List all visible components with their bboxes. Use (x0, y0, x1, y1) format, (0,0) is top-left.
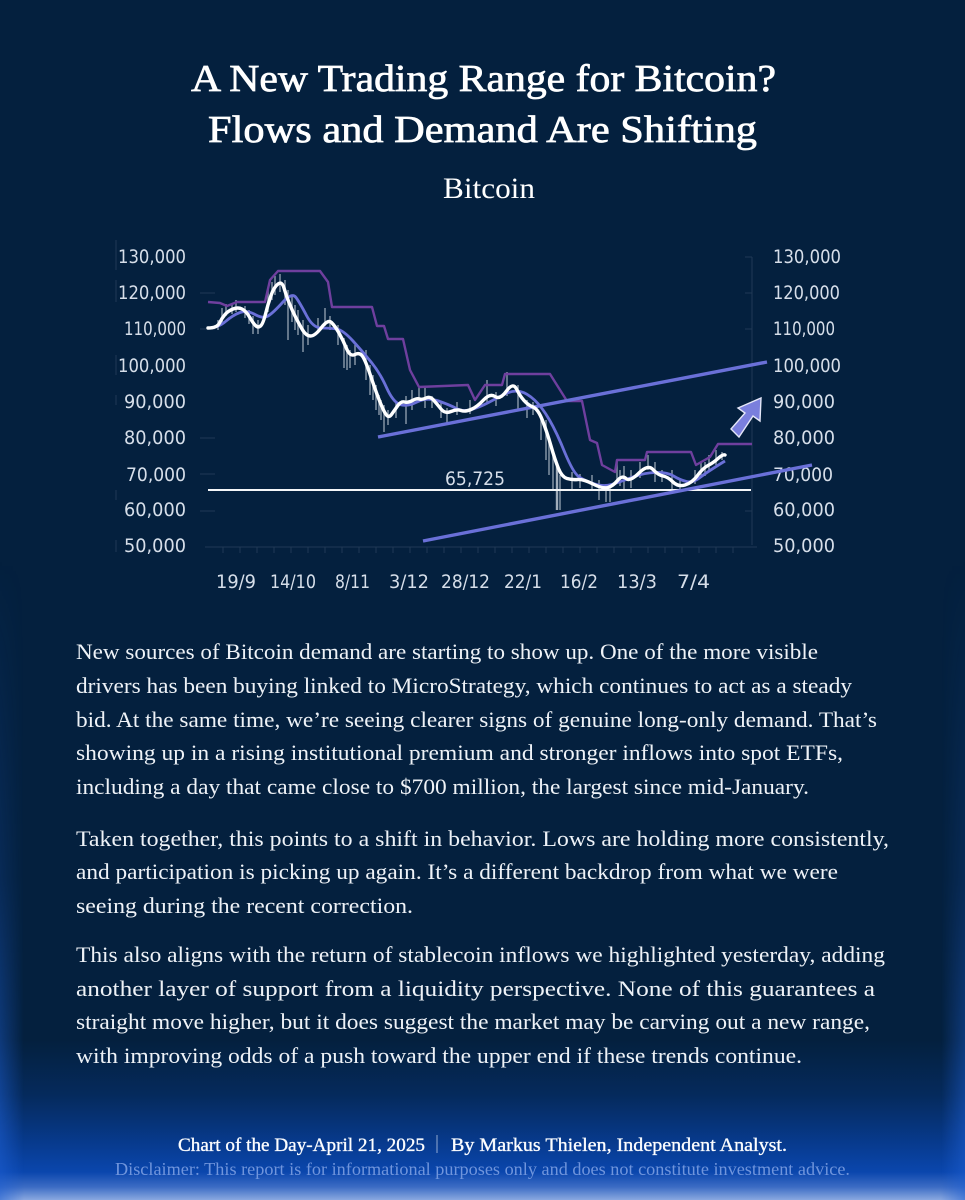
support level line (208, 489, 751, 491)
x axis labels: 13/3 (617, 571, 657, 593)
paragraph 3: This also aligns with the return of stablecoin inflows we highlighted yesterday, adding (76, 942, 885, 967)
paragraph 1: including a day that came close to $700 million, the largest since mid-January. (76, 774, 809, 799)
x axis labels: 3/12 (389, 571, 429, 593)
white price line (208, 283, 725, 488)
right axis labels (773, 246, 841, 557)
x axis labels: 7/4 (677, 571, 710, 593)
paragraph 3: another layer of support from a liquidity perspective. None of this guarantees a (76, 976, 875, 1001)
title: Flows and Demand Are Shifting (208, 109, 757, 151)
left axis labels: 90,000 (124, 391, 186, 413)
chart: Bitcoin price (116, 240, 841, 593)
right axis labels: 50,000 (773, 535, 835, 557)
right axis labels: 60,000 (773, 499, 835, 521)
footer byline (178, 1135, 787, 1156)
paragraph 2: and participation is picking up again. It’s a different backdrop from what we were (76, 859, 838, 884)
lower trend line (423, 465, 812, 541)
large wick (556, 463, 558, 510)
subtitle: Bitcoin (443, 172, 535, 205)
left axis labels: 110,000 (124, 318, 186, 340)
left axis labels: 130,000 (118, 246, 186, 268)
x axis labels: 8/11 (335, 571, 370, 593)
x axis labels: 14/10 (270, 571, 316, 593)
left axis labels: 100,000 (118, 355, 186, 377)
paragraph 1: drivers has been buying linked to MicroStrategy, which continues to act as a steady (76, 673, 852, 698)
left axis labels: 70,000 (126, 464, 186, 486)
paragraph 3 (76, 942, 885, 1068)
left axis labels: 120,000 (118, 282, 186, 304)
paragraph 1: New sources of Bitcoin demand are starting to show up. One of the more visible (76, 639, 818, 664)
right axis labels: 100,000 (773, 355, 841, 377)
arrow: upward move (731, 398, 761, 437)
right axis labels: 120,000 (773, 282, 840, 304)
disclaimer: Disclaimer: This report is for informational purposes only and does not constitute investment advice. (115, 1159, 850, 1179)
x axis labels: 22/1 (504, 571, 542, 593)
left axis labels (118, 246, 186, 557)
daily price spikes (218, 274, 722, 510)
support level label: 65,725 (445, 468, 505, 490)
title (191, 58, 776, 151)
paragraph 1: bid. At the same time, we’re seeing clearer signs of genuine long-only demand. That’s (76, 707, 877, 732)
right axis labels: 110,000 (773, 318, 835, 340)
axis frame and ticks (116, 240, 757, 553)
paragraph 3: straight move higher, but it does suggest the market may be carving out a new range, (76, 1009, 870, 1034)
blue moving average line (208, 296, 725, 486)
right axis labels: 70,000 (773, 464, 833, 486)
x axis labels: 16/2 (560, 571, 598, 593)
left axis labels: 50,000 (124, 535, 186, 557)
footer byline: By Markus Thielen, Independent Analyst. (451, 1136, 787, 1156)
purple upper band line (208, 271, 752, 472)
left axis labels: 80,000 (124, 427, 186, 449)
upper trend line (378, 362, 767, 437)
x axis labels: 28/12 (441, 571, 490, 593)
paragraph 2: seeing during the recent correction. (76, 893, 413, 918)
right axis labels: 80,000 (773, 427, 835, 449)
x axis labels (216, 571, 710, 593)
title: A New Trading Range for Bitcoin? (191, 58, 776, 100)
paragraph 3: with improving odds of a push toward the upper end if these trends continue. (76, 1043, 802, 1068)
right axis labels: 90,000 (773, 391, 835, 413)
left axis labels: 60,000 (124, 499, 186, 521)
right axis labels: 130,000 (773, 246, 841, 268)
paragraph 1: showing up in a rising institutional premium and stronger inflows into spot ETFs, (76, 740, 843, 765)
x axis labels: 19/9 (216, 571, 256, 593)
paragraph 2 (76, 826, 889, 918)
paragraph 2: Taken together, this points to a shift in behavior. Lows are holding more consistently, (76, 826, 889, 851)
paragraph 1 (76, 639, 877, 799)
footer byline: Chart of the Day-April 21, 2025 (178, 1136, 425, 1156)
